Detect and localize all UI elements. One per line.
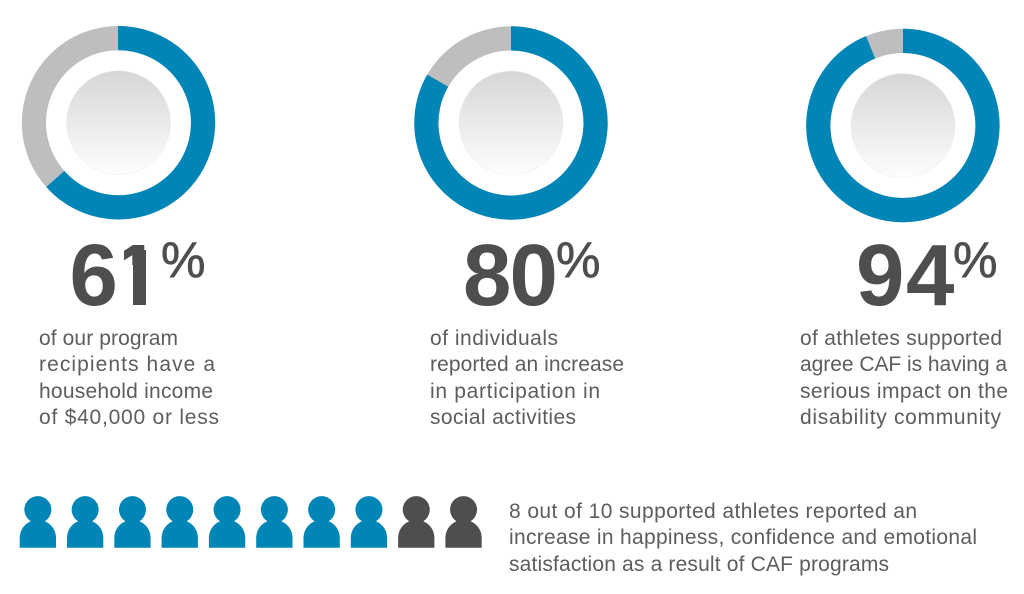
pictogram: 8 of 10 people (20, 496, 482, 548)
big number: 80%: % (556, 232, 600, 288)
panel: 80 percent stat (426, 38, 624, 429)
text: 80 percent description: social activities (430, 406, 576, 429)
text: 94 percent description: of athletes supported (800, 327, 1002, 350)
big number: 94%: % (953, 232, 997, 288)
big number: 80%: 0 (510, 227, 558, 324)
donut chart: 94 percent (818, 41, 988, 210)
big number: 61%: % (161, 232, 205, 288)
big number: 80% (463, 227, 600, 324)
text: 8 out of 10 statement: 8 out of 10 supported athletes reported an (509, 500, 917, 523)
text: 80 percent description: of individuals (430, 327, 558, 350)
text: 61 percent description: of our program (39, 327, 178, 350)
big number: 61%: 6 (70, 227, 118, 324)
text: 94 percent description (800, 327, 1008, 429)
panel: 61 percent stat (34, 38, 219, 429)
text: 80 percent description: in participation in (430, 380, 600, 403)
text: 61 percent description: of $40,000 or less (39, 406, 219, 429)
text: 80 percent description (430, 327, 624, 429)
text: 8 out of 10 statement (509, 500, 977, 576)
text: 61 percent description: household income (39, 380, 213, 403)
text: 94 percent description: disability community (800, 406, 1002, 429)
text: 61 percent description (39, 327, 219, 429)
big number: 80%: 8 (463, 227, 511, 324)
donut chart: 80 percent (426, 38, 596, 208)
text: 94 percent description: serious impact on the (800, 380, 1008, 403)
donut chart: 61 percent (34, 38, 203, 207)
big number: 61% (72, 242, 204, 306)
big number: 61%: 1 (112, 227, 160, 324)
big number: 94% (856, 227, 997, 324)
text: 94 percent description: agree CAF is having a (800, 353, 1007, 376)
panel: 94 percent stat (800, 41, 1008, 429)
text: 8 out of 10 statement: increase in happiness, confidence and emotional (509, 526, 977, 549)
big number: 94%: 4 (906, 227, 954, 324)
text: 8 out of 10 statement: satisfaction as a result of CAF programs (509, 553, 889, 576)
text: 61 percent description: recipients have a (39, 353, 215, 376)
big number: 94%: 9 (856, 227, 904, 324)
text: 80 percent description: reported an increase (430, 353, 624, 376)
